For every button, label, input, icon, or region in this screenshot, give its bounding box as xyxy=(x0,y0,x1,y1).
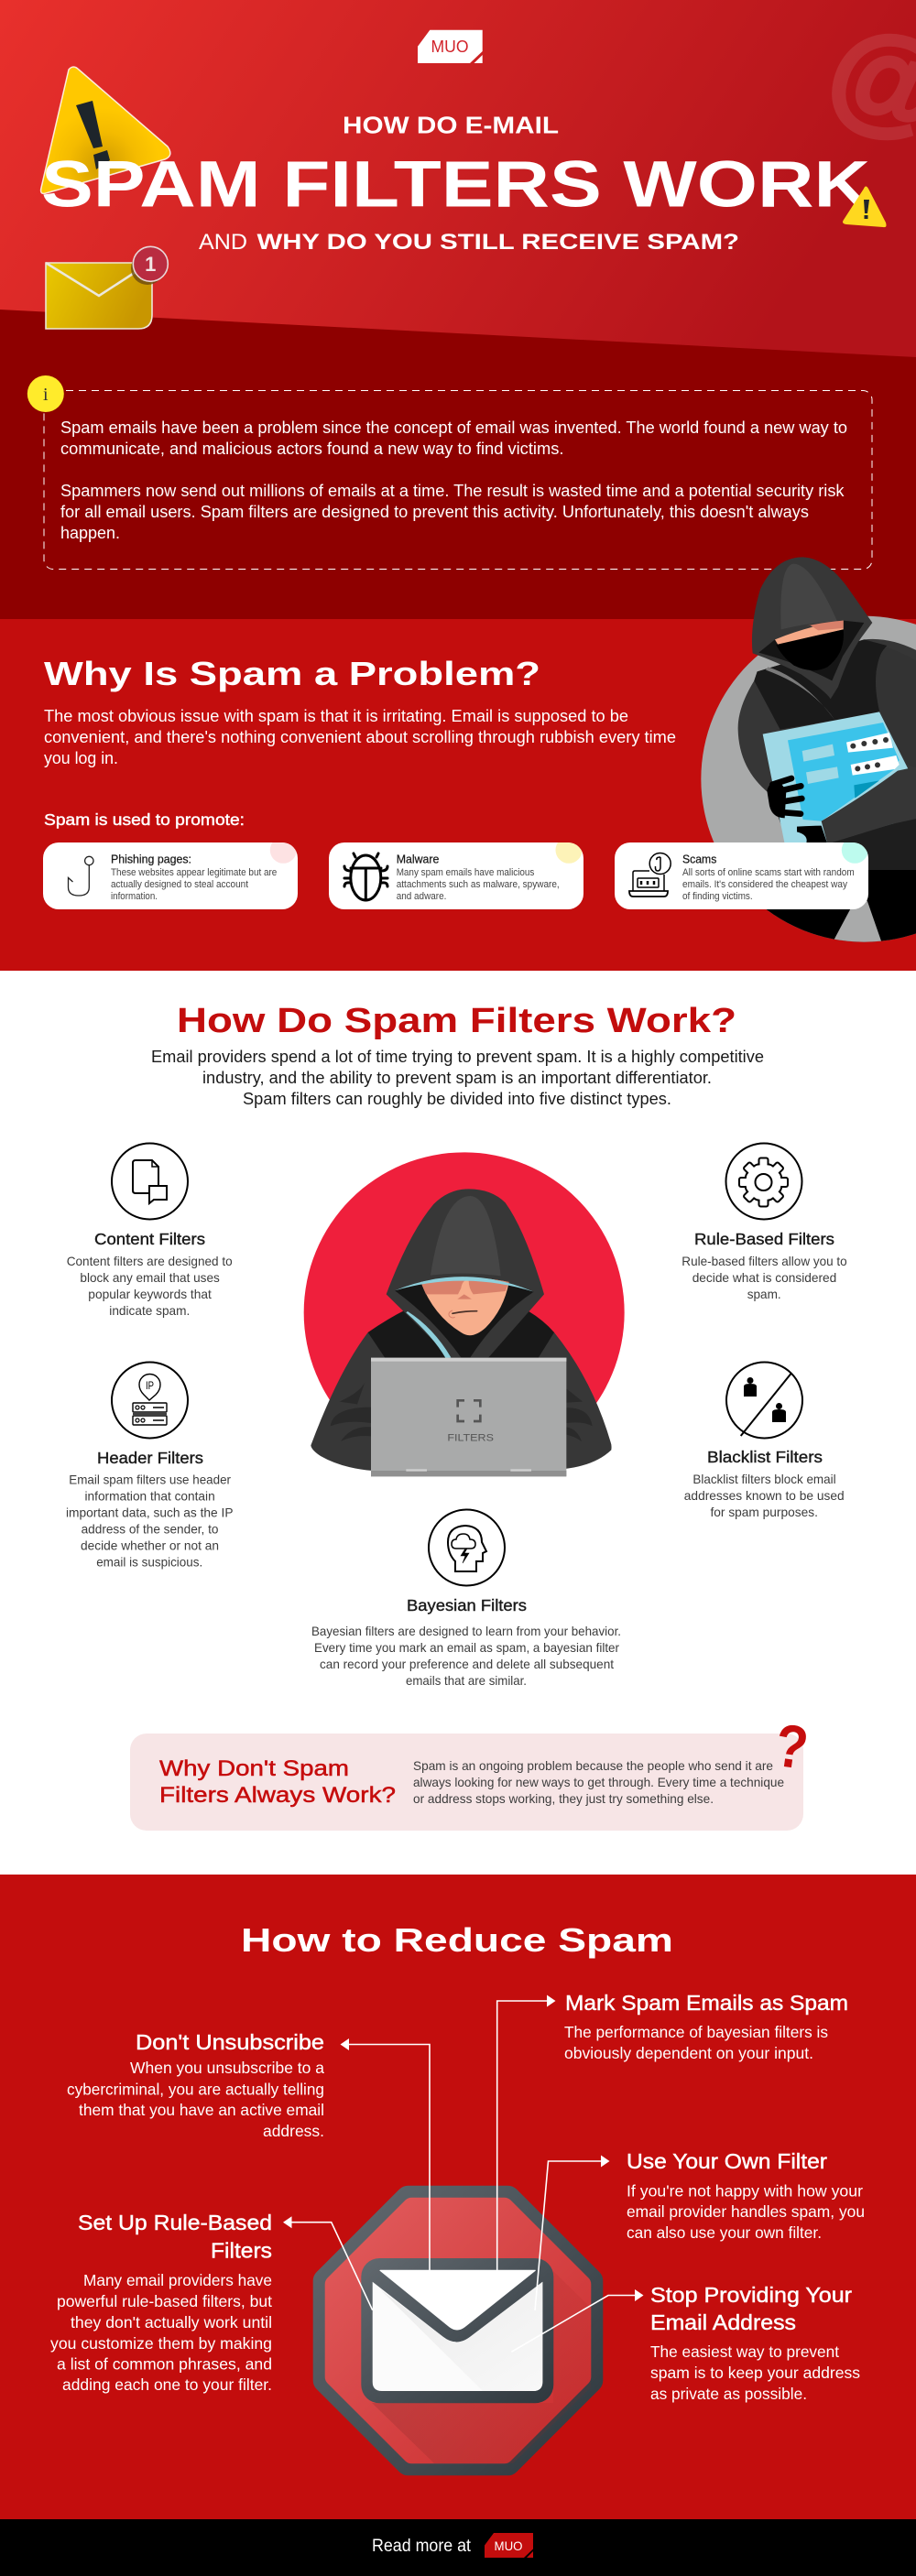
heading: how do spam filters work: How Do Spam Filters Work? xyxy=(177,1002,736,1040)
heading: Filters Always Work? xyxy=(159,1783,396,1808)
header background xyxy=(0,0,916,366)
text block xyxy=(50,2271,272,2394)
subheading: spam is used to promote: Spam is used to promote: xyxy=(44,810,245,829)
arrow xyxy=(511,2289,643,2352)
logo: MUO xyxy=(418,30,483,63)
text block: intro paragraph 2: for all email users. Spam filters are designed to prevent this activity. Unfortunately, this doesn't always xyxy=(60,503,809,521)
heading: Don't Unsubscribe xyxy=(136,2030,324,2054)
panel: bayesian filters xyxy=(311,1509,621,1688)
icon: gear xyxy=(725,1143,802,1220)
text block: intro paragraph 2: Spammers now send out millions of emails at a time. The result is wasted time and a potential security risk xyxy=(60,482,845,500)
icon: document and speech bubble xyxy=(112,1143,188,1220)
text block: scams: All sorts of online scams start with random xyxy=(682,867,855,878)
icon: head with cloud xyxy=(429,1509,505,1586)
icon: info badge: i xyxy=(43,385,49,405)
heading: Stop Providing Your xyxy=(650,2283,852,2307)
text block xyxy=(413,1758,784,1806)
footer: read more: Read more at xyxy=(372,2537,472,2556)
heading: Rule-Based Filters xyxy=(694,1230,834,1248)
icon: envelope with notification badge xyxy=(46,246,168,329)
text block: scams: Scams xyxy=(682,852,717,866)
callout: stop providing your email address xyxy=(511,2283,860,2403)
text block: can record your preference and delete all subsequent xyxy=(320,1658,614,1671)
heading: Email Address xyxy=(650,2310,796,2334)
text block: filters intro: Email providers spend a lot of time trying to prevent spam. It is a highly competitive xyxy=(151,1048,764,1066)
text block: always looking for new ways to get through. Every time a technique xyxy=(413,1775,784,1789)
heading: Content Filters xyxy=(94,1230,205,1248)
illustration: hooded hacker with login screen xyxy=(701,557,916,946)
text block: for spam purposes. xyxy=(711,1505,818,1519)
text block: email provider handles spam, you xyxy=(627,2202,865,2221)
icon: large warning triangle xyxy=(41,67,170,193)
icon: IP pin and servers xyxy=(112,1363,188,1438)
heading xyxy=(78,2211,272,2262)
text block: Spam is an ongoing problem because the people who send it are xyxy=(413,1758,773,1773)
heading: Bayesian Filters xyxy=(407,1596,527,1614)
title: SPAM FILTERS WORK xyxy=(41,148,870,222)
callout: use your own filter xyxy=(535,2149,865,2310)
panel: phishing pages card xyxy=(43,837,298,909)
text block: When you unsubscribe to a xyxy=(130,2059,324,2077)
text block: Email spam filters use header xyxy=(69,1473,231,1487)
text block: decide whether or not an xyxy=(81,1539,219,1553)
text block: malware xyxy=(397,852,560,902)
panel: why don't spam filters always work xyxy=(130,1711,812,1831)
icon: IP pin and servers: IP xyxy=(146,1379,154,1392)
illustration: stop sign with envelope xyxy=(326,2199,591,2463)
text block xyxy=(627,2181,865,2242)
icon: bug xyxy=(344,853,387,900)
text block: address. xyxy=(263,2122,324,2140)
callout: set up rule-based filters xyxy=(50,2211,373,2394)
text block xyxy=(67,1255,233,1318)
illustration: hacker at laptop xyxy=(304,1152,625,1476)
panel: header filters xyxy=(66,1363,233,1570)
text block: important data, such as the IP xyxy=(66,1506,233,1520)
heading: Set Up Rule-Based xyxy=(78,2211,272,2234)
text block: malware: attachments such as malware, spyware, xyxy=(397,879,560,890)
text block: address of the sender, to xyxy=(82,1523,219,1537)
text block: adding each one to your filter. xyxy=(62,2375,272,2394)
heading: how do e-mail: HOW DO E-MAIL xyxy=(343,112,559,139)
icon: info badge xyxy=(27,375,64,412)
text block: Bayesian filters are designed to learn from your behavior. xyxy=(311,1625,621,1638)
subtitle: WHY DO YOU STILL RECEIVE SPAM? xyxy=(256,230,739,255)
heading: Filters xyxy=(211,2238,272,2262)
text block: problem description xyxy=(44,707,676,767)
text block: Many email providers have xyxy=(83,2271,272,2289)
text block xyxy=(67,2059,324,2140)
text block: scams: of finding victims. xyxy=(682,891,753,902)
heading: why is spam a problem: Why Is Spam a Problem? xyxy=(44,655,540,692)
text block: you customize them by making xyxy=(50,2334,272,2353)
heading xyxy=(650,2283,852,2334)
arrow xyxy=(535,2156,610,2310)
text block: problem description: The most obvious issue with spam is that it is irritating. Email is supposed to be xyxy=(44,707,628,725)
reduce section background xyxy=(0,1875,916,2519)
heading: Why Don't Spam xyxy=(159,1756,349,1781)
text block: The easiest way to prevent xyxy=(650,2342,839,2361)
icon: laptop with hook xyxy=(629,853,671,897)
problem section background xyxy=(0,619,916,971)
heading: Mark Spam Emails as Spam xyxy=(565,1991,848,2015)
icon: small warning triangle xyxy=(843,187,887,227)
text block: or address stops working, they just try something else. xyxy=(413,1791,714,1806)
text block: indicate spam. xyxy=(109,1304,190,1318)
text block: phishing: actually designed to steal account xyxy=(111,879,248,890)
heading: how to reduce spam: How to Reduce Spam xyxy=(241,1921,673,1959)
text block xyxy=(682,1255,847,1301)
callout: don't unsubscribe xyxy=(67,2030,430,2270)
text block xyxy=(684,1473,845,1519)
text block: malware: and adware. xyxy=(397,891,446,902)
text block: The performance of bayesian filters is xyxy=(564,2023,828,2041)
text block: Every time you mark an email as spam, a bayesian filter xyxy=(314,1641,619,1655)
heading: Use Your Own Filter xyxy=(627,2149,827,2173)
text block: emails that are similar. xyxy=(406,1674,527,1688)
footer: read more xyxy=(372,2533,533,2558)
text block: intro paragraph 1: communicate, and malicious actors found a new way to find victims. xyxy=(60,440,564,458)
text block: intro paragraph 2 xyxy=(60,482,845,542)
heading: Blacklist Filters xyxy=(707,1448,823,1466)
arrow xyxy=(497,1994,555,2270)
footer background xyxy=(0,2519,916,2576)
text block: spam is to keep your address xyxy=(650,2364,860,2382)
text block: filters intro: industry, and the ability to prevent spam is an important differentiator. xyxy=(202,1069,712,1087)
filters section background xyxy=(0,971,916,1875)
panel: scams card xyxy=(615,837,868,909)
text block: as private as possible. xyxy=(650,2385,807,2403)
heading: Header Filters xyxy=(97,1449,203,1467)
logo: MUO footer xyxy=(485,2533,533,2558)
text block: they don't actually work until xyxy=(71,2313,272,2331)
text block xyxy=(650,2342,860,2403)
icon: question mark: ? xyxy=(771,1711,812,1782)
text block: popular keywords that xyxy=(88,1288,212,1301)
text block: email is suspicious. xyxy=(96,1556,202,1570)
text block: If you're not happy with how your xyxy=(627,2181,863,2200)
text block: spam. xyxy=(747,1288,781,1301)
text block: phishing: Phishing pages: xyxy=(111,852,191,866)
text block: obviously dependent on your input. xyxy=(564,2044,813,2062)
text block: cybercriminal, you are actually telling xyxy=(67,2081,324,2099)
text block xyxy=(311,1625,621,1688)
text block: decide what is considered xyxy=(692,1271,836,1285)
text block: intro paragraph 2: happen. xyxy=(60,524,120,542)
text block: a list of common phrases, and xyxy=(57,2355,272,2374)
text block: them that you have an active email xyxy=(79,2101,324,2119)
icon: envelope with notification badge: 1 xyxy=(145,253,156,276)
panel: rule-based filters xyxy=(682,1143,847,1301)
text block: phishing: These websites appear legitimate but are xyxy=(111,867,277,878)
text block: filters intro: Spam filters can roughly be divided into five distinct types. xyxy=(243,1090,671,1108)
panel: intro text box xyxy=(27,375,872,570)
text block: problem description: convenient, and there's nothing convenient about scrolling through rubbish every time xyxy=(44,728,676,746)
panel: blacklist filters xyxy=(684,1363,845,1519)
icon: fish hook xyxy=(68,856,93,896)
text block: Blacklist filters block email xyxy=(692,1473,836,1486)
heading xyxy=(159,1756,396,1808)
text block: problem description: you log in. xyxy=(44,749,118,767)
intro dark background xyxy=(0,310,916,619)
text block: intro paragraph 1 xyxy=(60,418,847,458)
subtitle: AND xyxy=(199,230,247,255)
text block: information that contain xyxy=(84,1490,215,1504)
text block: Rule-based filters allow you to xyxy=(682,1255,847,1268)
text block: malware: Malware xyxy=(397,852,439,866)
icon: blocked users xyxy=(726,1363,802,1438)
illustration: hacker at laptop: FILTERS xyxy=(447,1432,494,1443)
logo: MUO footer: MUO xyxy=(495,2538,523,2553)
text block: scams xyxy=(682,852,855,902)
text block: block any email that uses xyxy=(80,1271,220,1285)
text block: Content filters are designed to xyxy=(67,1255,233,1268)
text block: filters intro xyxy=(151,1048,764,1108)
text block: phishing: information. xyxy=(111,891,158,902)
text block: phishing xyxy=(111,852,277,902)
logo: MUO: MUO xyxy=(431,38,469,56)
arrow xyxy=(341,2038,430,2270)
text block: powerful rule-based filters, but xyxy=(57,2292,272,2310)
text block: malware: Many spam emails have malicious xyxy=(397,867,535,878)
text block xyxy=(564,2023,828,2062)
text block: scams: emails. It's considered the cheapest way xyxy=(682,879,847,890)
panel: malware card xyxy=(329,837,583,909)
text block xyxy=(66,1473,233,1570)
callout: mark spam emails as spam xyxy=(497,1991,848,2270)
text block: intro paragraph 1: Spam emails have been a problem since the concept of email was invented. The world found a new way to xyxy=(60,418,847,437)
arrow xyxy=(283,2216,373,2310)
panel: content filters xyxy=(67,1143,233,1318)
text block: can also use your own filter. xyxy=(627,2223,822,2242)
text block: addresses known to be used xyxy=(684,1489,845,1503)
